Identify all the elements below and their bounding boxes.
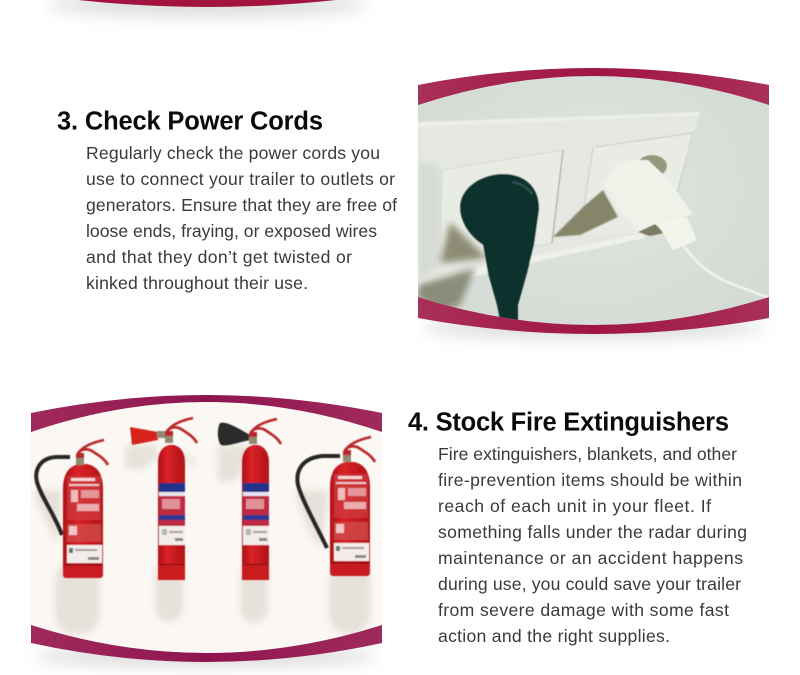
- text block: fire extinguishers: [438, 444, 747, 646]
- top frame band: [418, 68, 769, 110]
- text block: fire extinguishers: fire-prevention items should be within: [438, 470, 742, 490]
- text block: fire extinguishers: during use, you could save your trailer: [438, 574, 741, 594]
- text block: power cords: use to connect your trailer to outlets or: [86, 169, 395, 189]
- text block: fire extinguishers: action and the right supplies.: [438, 626, 670, 646]
- text block: power cords: and that they don’t get twisted or: [86, 247, 352, 267]
- black plug: [460, 174, 539, 330]
- panel: fire extinguishers photo: [31, 385, 382, 670]
- text block: fire extinguishers: something falls under the radar during: [438, 522, 747, 542]
- white plug: [636, 159, 692, 228]
- heading: 3. Check Power Cords: 3. Check Power Cords: [57, 108, 323, 136]
- socket hole: [640, 154, 668, 174]
- text block: power cords: [86, 143, 397, 293]
- wall shadows: [34, 445, 370, 635]
- extinguishers photo: [31, 402, 382, 653]
- text block: power cords: Regularly check the power cords you: [86, 143, 380, 163]
- top frame band: [31, 395, 382, 438]
- cable: [683, 245, 770, 298]
- image shadow: [34, 645, 378, 667]
- heading: 4. Stock Fire Extinguishers: 4. Stock Fire Extinguishers: [408, 408, 729, 436]
- text block: power cords: kinked throughout their use.: [86, 273, 308, 293]
- extinguisher 1: [36, 440, 108, 578]
- text block: fire extinguishers: Fire extinguishers, blankets, and other: [438, 444, 737, 464]
- socket housing: [418, 113, 700, 280]
- outlet photo: [418, 76, 769, 325]
- previous section image remnant: [47, 0, 367, 17]
- bottom frame band: [418, 290, 769, 334]
- text block: fire extinguishers: maintenance or an accident happens: [438, 548, 743, 568]
- image shadow: [421, 317, 765, 339]
- text block: fire extinguishers: reach of each unit in your fleet. If: [438, 496, 711, 516]
- bottom frame band: [31, 618, 382, 662]
- panel: power outlet photo: [418, 60, 770, 340]
- shadows: [553, 190, 618, 237]
- text block: fire extinguishers: from severe damage with some fast: [438, 600, 729, 620]
- extinguisher 4: [297, 437, 375, 576]
- extinguisher 2 with red nozzle: [130, 418, 197, 580]
- extinguisher 3 with black nozzle: [218, 419, 281, 580]
- text block: power cords: loose ends, fraying, or exposed wires: [86, 221, 377, 241]
- text block: power cords: generators. Ensure that they are free of: [86, 195, 397, 215]
